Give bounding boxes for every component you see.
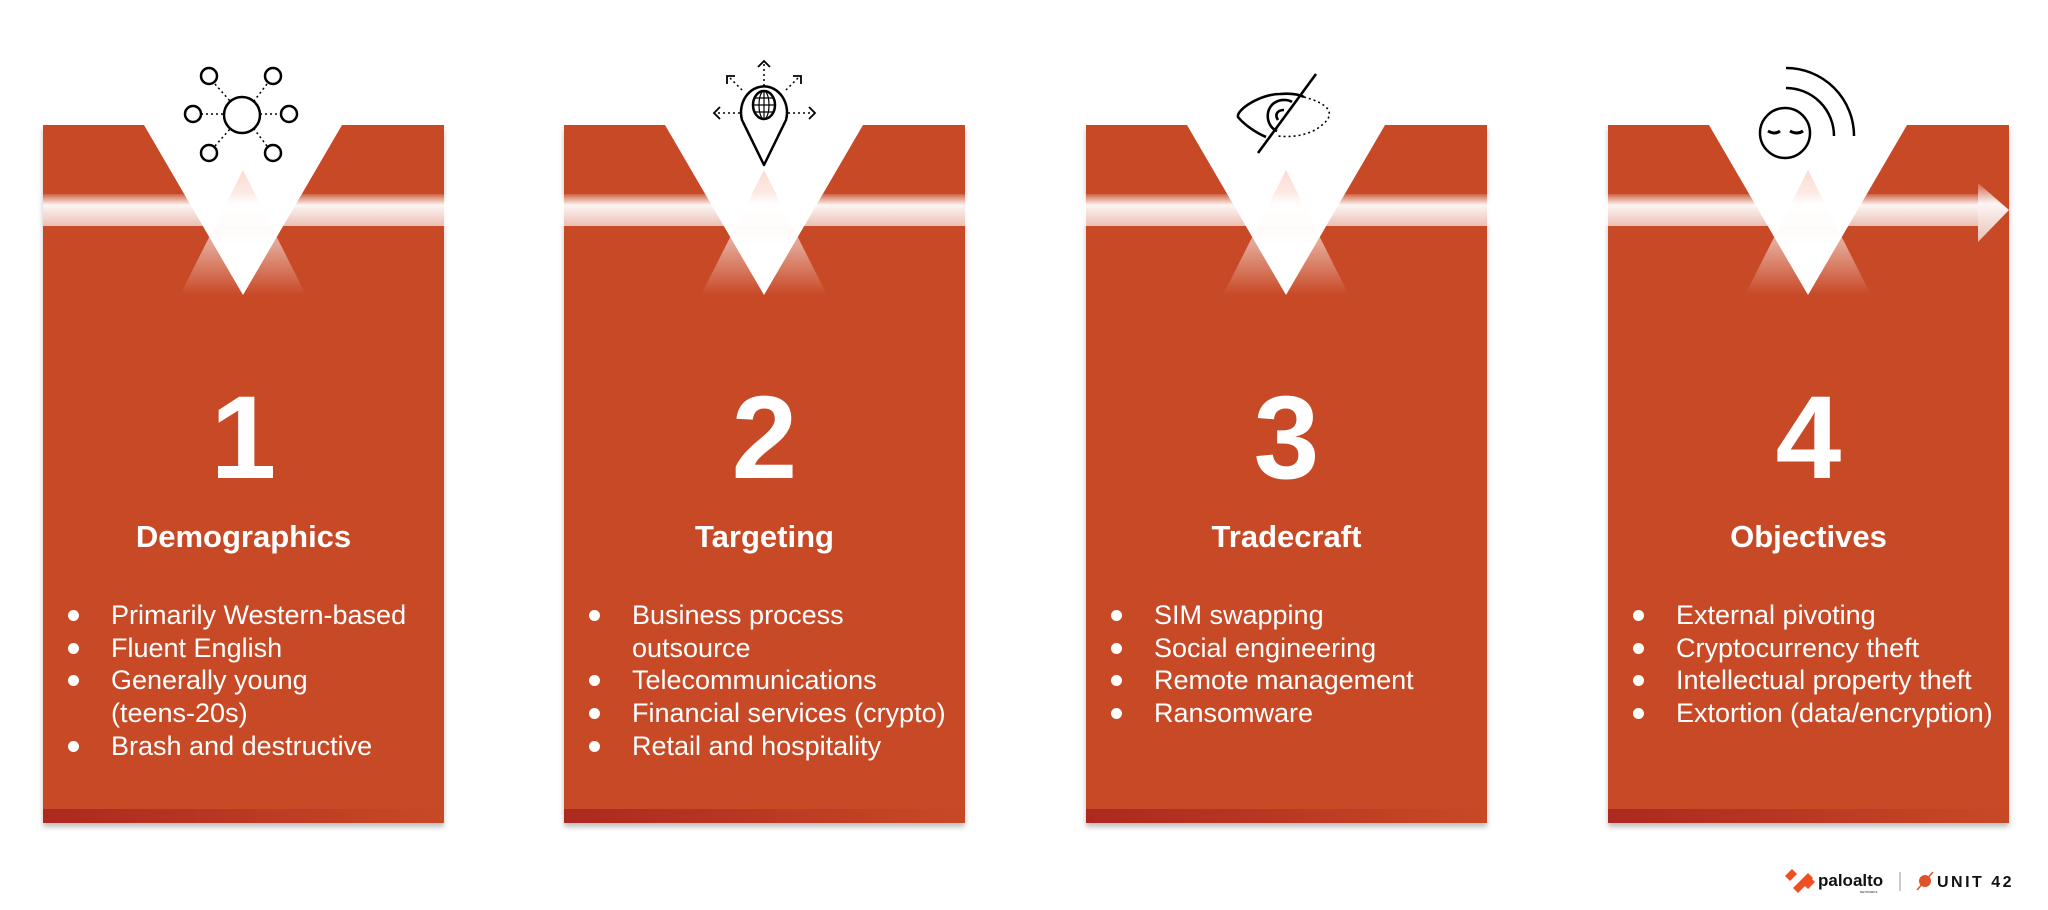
panel: targeting: [564, 125, 965, 823]
icon: network hub: [185, 68, 297, 161]
inner light triangles: [180, 170, 1871, 295]
logo: paloalto networks: [1785, 869, 1883, 894]
bullet list: targeting: Business process: [632, 600, 844, 630]
icon: face with signal waves: [1760, 68, 1854, 158]
logo: paloalto networks: NETWORKS: [1860, 890, 1877, 894]
bullet list: objectives: [1633, 600, 1993, 728]
bullet list: objectives: Cryptocurrency theft: [1676, 633, 1919, 663]
bullet list: targeting: outsource: [632, 633, 751, 663]
bullet list: objectives: External pivoting: [1676, 600, 1876, 630]
bullet list: targeting: Telecommunications: [632, 665, 877, 695]
panel: tradecraft: [1086, 125, 1487, 823]
bullet list: objectives: Intellectual property theft: [1676, 665, 1972, 695]
icon: crossed eye: [1238, 74, 1329, 153]
logo: unit 42: UNIT 42: [1937, 874, 2014, 891]
heading: Objectives: Objectives: [1730, 519, 1887, 554]
number 3: 3: [1254, 372, 1319, 504]
bullet list: tradecraft: Remote management: [1154, 665, 1414, 695]
panel: objectives: [1608, 125, 2009, 823]
bullet list: objectives: Extortion (data/encryption): [1676, 698, 1993, 728]
bullet list: tradecraft: Social engineering: [1154, 633, 1376, 663]
bullet list: demographics: [68, 600, 406, 761]
V cutouts: [144, 125, 1907, 295]
panel: demographics: [43, 125, 444, 823]
number 2: 2: [732, 372, 797, 504]
icon: location pin with globe: [714, 61, 815, 165]
bullet list: demographics: Primarily Western-based: [111, 600, 406, 630]
bullet list: demographics: (teens-20s): [111, 698, 248, 728]
arrow: timeline band: [43, 183, 2009, 242]
bullet list: targeting: Financial services (crypto): [632, 698, 946, 728]
bullet list: demographics: Brash and destructive: [111, 731, 372, 761]
number 4: 4: [1776, 372, 1841, 504]
bullet list: targeting: [589, 600, 946, 761]
bullet list: demographics: Generally young: [111, 665, 308, 695]
logo: paloalto networks: paloalto: [1818, 871, 1883, 890]
bullet list: targeting: Retail and hospitality: [632, 731, 881, 761]
bullet list: tradecraft: SIM swapping: [1154, 600, 1324, 630]
bullet list: demographics: Fluent English: [111, 633, 282, 663]
bullet list: tradecraft: Ransomware: [1154, 698, 1313, 728]
number 1: 1: [211, 372, 276, 504]
heading: Demographics: Demographics: [136, 519, 351, 554]
heading: Tradecraft: Tradecraft: [1212, 519, 1361, 554]
bullet list: tradecraft: [1111, 600, 1414, 728]
heading: Targeting: Targeting: [695, 519, 834, 554]
